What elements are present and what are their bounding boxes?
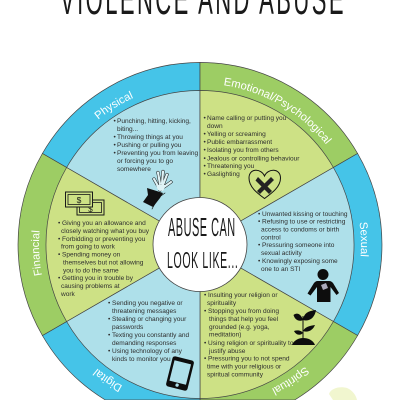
text block: sexual: Pressuring someone into <box>262 242 335 249</box>
text block: spiritual: • <box>204 340 207 347</box>
text block: emotional: Gaslighting <box>207 171 240 178</box>
text block: financial: themselves but not allowing <box>63 260 144 266</box>
panel: physical band <box>42 62 200 244</box>
text block: sexual: • <box>258 218 261 226</box>
text block: financial: • <box>58 252 61 258</box>
text block: emotional: Yelling or screaming <box>207 131 266 138</box>
text block: physical: • <box>114 142 116 149</box>
text block: spiritual: Using religion or spirituality to <box>208 340 294 347</box>
text block: digital: • <box>108 316 111 323</box>
text block: financial: Forbidding or preventing you <box>62 236 146 243</box>
text block: financial: • <box>58 236 61 243</box>
text block: emotional: • <box>204 139 206 146</box>
text block: financial: work <box>60 291 76 298</box>
text block: financial: Giving you an allowance and <box>62 220 146 227</box>
text block: digital: threatening messages <box>112 308 177 315</box>
panel: digital sector <box>67 244 200 399</box>
text block: spiritual: • <box>204 292 207 299</box>
label: Emotional/Psychological: Emotional/Psychological <box>224 78 332 144</box>
text block: spiritual: Insulting your religion or <box>208 292 278 299</box>
text block: emotional: • <box>204 115 206 122</box>
text block: physical: biting... <box>117 126 138 133</box>
text block: spiritual: • <box>204 308 207 315</box>
text block: emotional: • <box>204 163 206 170</box>
icon: phone <box>166 356 194 391</box>
panel: physical sector <box>67 90 200 244</box>
icon: money <box>66 192 104 215</box>
text block: financial: Spending money on <box>62 252 121 258</box>
text block: emotional: down <box>207 123 223 130</box>
text block: spiritual: spirituality <box>207 300 237 307</box>
text block: digital: Texting you constantly and <box>112 332 190 339</box>
icon: money: $ <box>77 195 82 205</box>
panel: sexual sector <box>200 168 354 322</box>
text block: sexual: Knowingly exposing some <box>262 258 338 265</box>
text block: financial: • <box>58 275 61 282</box>
text block: digital: Stealing or changing your <box>112 316 187 323</box>
icon: heart with bandage <box>249 170 280 198</box>
text block: spiritual: grounded (e.g. yoga, <box>209 324 270 331</box>
center circle <box>153 198 247 292</box>
text block: physical: or forcing you to go <box>117 158 173 165</box>
panel: financial band <box>18 154 200 336</box>
text block: physical: • <box>114 134 116 141</box>
text block: emotional: • <box>204 131 206 138</box>
label: Sexual: Sexual <box>360 222 369 256</box>
text block: sexual: access to condoms or birth <box>261 226 340 234</box>
panel: digital band <box>42 244 200 400</box>
text block: sexual: sexual activity <box>261 250 302 257</box>
text block: physical: Pushing or pulling you <box>117 142 182 149</box>
wheel <box>18 62 382 400</box>
text block: spiritual: Pressuring you to not spend <box>208 356 290 362</box>
panel: financial sector <box>46 168 200 322</box>
icon: plant <box>292 310 316 345</box>
text block: sexual: control <box>261 234 281 242</box>
text block: digital: • <box>108 348 111 355</box>
text block: spiritual: things that help you feel <box>209 316 279 323</box>
panel: emotional sector <box>200 90 333 244</box>
text block: spiritual: • <box>204 356 207 362</box>
text block: digital: kinds to monitor you <box>112 356 171 363</box>
text block: physical: • <box>114 118 116 125</box>
panel: emotional band <box>200 62 358 244</box>
text block: sexual: Unwanted kissing or touching <box>262 211 348 218</box>
text block: spiritual: spiritual community <box>207 372 264 378</box>
text block: physical: somewhere <box>117 166 151 173</box>
text block: financial: closely watching what you buy <box>61 228 150 235</box>
text block: financial: from going to work <box>61 244 116 250</box>
text block: physical: Punching, hitting, kicking, <box>117 118 191 125</box>
center text <box>167 214 238 273</box>
icon: person <box>308 269 339 302</box>
text block: digital: • <box>108 300 111 307</box>
text block: sexual: one to an STI <box>261 266 300 273</box>
text block: emotional: • <box>204 147 206 154</box>
panel: sexual band <box>200 154 382 336</box>
text block: sexual: • <box>258 258 261 265</box>
icon: money: $ <box>88 205 93 214</box>
center text: LOOK LIKE... <box>167 247 238 273</box>
label: Spiritual: Spiritual <box>272 368 309 396</box>
text block: spiritual: justify abuse <box>208 348 246 355</box>
text block: digital: • <box>108 332 111 339</box>
text block: sexual: • <box>258 211 261 218</box>
label: Financial: Financial <box>30 230 42 276</box>
text block: financial: causing problems at <box>61 283 120 290</box>
center text: ABUSE CAN <box>168 214 235 243</box>
text block: digital: Using technology of any <box>112 348 183 355</box>
text block: spiritual: meditation) <box>209 332 241 338</box>
text block: financial: • <box>58 220 61 227</box>
label: Digital: Digital <box>92 368 122 392</box>
panel: spiritual sector <box>200 244 333 398</box>
panel: spiritual band <box>200 244 358 400</box>
text block: emotional: • <box>204 171 206 178</box>
text block: emotional: Name calling or putting you <box>207 115 287 122</box>
text block: sexual: Refusing to use or restricting <box>262 218 346 226</box>
text block: sexual: • <box>258 242 261 249</box>
text block: spiritual: time with your religious or <box>207 364 282 370</box>
icon: watermark <box>329 387 357 400</box>
text block: emotional: Public embarrassment <box>207 139 272 146</box>
text block: physical: • <box>114 150 116 157</box>
text block: digital: passwords <box>112 324 144 331</box>
text block: digital: Sending you negative or <box>112 300 183 307</box>
text block: emotional: • <box>204 156 206 162</box>
text block: physical: Throwing things at you <box>117 134 183 141</box>
text block: financial: you to do the same <box>63 268 119 274</box>
text block: physical: Preventing you from leaving <box>117 150 199 157</box>
text block: emotional: Jealous or controlling behaviour <box>207 156 300 162</box>
text block: emotional: Isolating you from others <box>207 147 279 154</box>
icon: hands <box>143 172 171 209</box>
label: Physical: Physical <box>94 90 133 120</box>
text block: financial: Getting you in trouble by <box>62 275 134 282</box>
text block: digital: demanding responses <box>112 340 177 347</box>
text block: emotional: Threatening you <box>207 163 255 170</box>
text block: spiritual: Stopping you from doing <box>208 308 279 315</box>
